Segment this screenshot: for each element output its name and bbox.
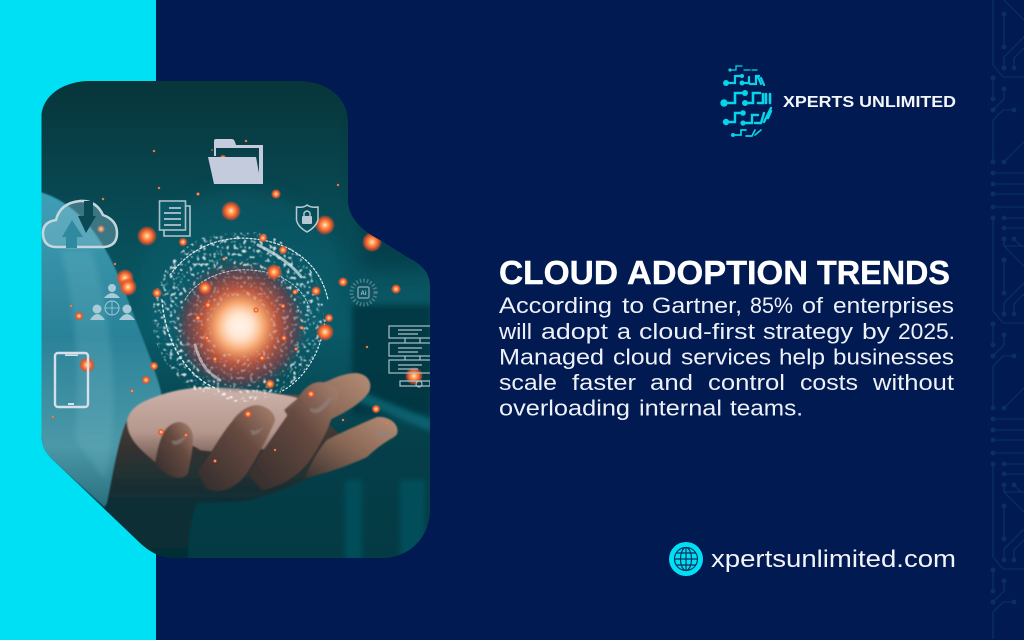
heading: CLOUD [499,254,618,291]
finger: right [305,417,398,478]
finger: ring [198,405,275,491]
icon: folder [208,139,263,184]
body text: According [499,293,612,318]
sleeve of person [40,192,162,510]
cyan side band [0,0,156,640]
body text: faster [572,370,636,395]
heading: TRENDS [817,254,950,291]
body text: teams. [730,396,803,420]
body text: Managed [499,344,604,370]
body text: and [650,370,693,395]
body text: overloading [499,396,630,420]
icon: people network [90,284,135,320]
icon: AI chip: Ai [360,291,367,297]
icon: cloud upload download [43,201,117,248]
globe [148,232,330,404]
icon: document [160,201,190,236]
body text: businesses [833,344,954,370]
finger: middle [248,382,338,490]
body text: control [708,370,785,395]
icon: logo globe [720,66,771,137]
body text: internal [639,396,722,420]
body text: to [622,293,644,318]
icon: smartphone [55,353,88,407]
body text: 2025. [898,319,955,344]
body text: cloud-first [639,319,755,344]
circuit pattern decoration [990,0,1024,639]
sleeve light beam [60,250,114,480]
body text: without [872,370,954,395]
body text [498,293,955,420]
icon: AI chip [352,280,376,304]
icon: website globe [669,542,703,576]
icon: server racks [389,326,433,387]
finger: far [284,372,372,420]
website link with globe icon [669,542,956,576]
company name: XPERTS UNLIMITED [783,94,956,111]
body text: a [617,319,632,344]
body text: strategy [763,319,853,344]
panel: hero photo of hand holding glowing globe [40,80,433,560]
body text: by [862,319,890,344]
body text: cloud [613,344,672,370]
heading: ADOPTION [627,254,808,291]
body text: adopt [541,319,608,344]
palm [127,387,300,462]
body text: services [681,344,771,370]
icon: security shield [296,205,318,232]
body text: Gartner, [652,293,742,318]
hand [100,373,398,560]
body text: 85% [750,293,793,318]
glowing light particles [52,140,423,463]
body text: help [779,344,825,370]
body text: will [498,319,532,344]
website address: xpertsunlimited.com [711,546,956,573]
body text: scale [499,370,557,395]
finger: small [155,422,193,478]
fingernails [171,397,396,445]
body text: of [802,293,824,318]
hand and wrist silhouette [100,390,345,560]
logo: dotted circuit globe with company name [720,66,956,137]
body text: costs [800,370,858,395]
body text: enterprises [833,293,954,318]
